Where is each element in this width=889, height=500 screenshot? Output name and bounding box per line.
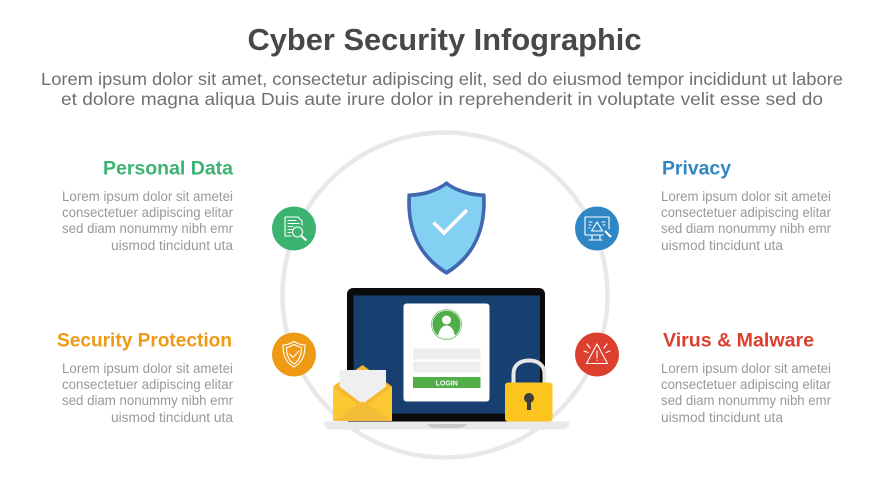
text block: Lorem ipsum dolor sit ametei [661, 361, 831, 376]
heading: Virus & Malware [663, 330, 814, 352]
text block: uismod tincidunt uta [111, 238, 233, 253]
laptop [324, 288, 569, 430]
text block [661, 361, 831, 425]
text block [62, 189, 233, 253]
text block: consectetuer adipiscing elitar [62, 377, 233, 392]
icon: warning triangle [575, 332, 619, 376]
password field [413, 362, 480, 372]
subtitle: Lorem ipsum dolor sit amet, consectetur adipiscing elit, sed do eiusmod tempor incididunt ut labore [41, 69, 843, 89]
subtitle [41, 69, 843, 109]
subtitle: et dolore magna aliqua Duis aute irure dolor in reprehenderit in voluptate velit esse sed do [61, 89, 823, 109]
panel: privacy [661, 158, 831, 253]
central ring [282, 132, 608, 458]
icon: envelope [333, 365, 392, 421]
text block [62, 361, 233, 425]
heading: Personal Data [103, 158, 233, 180]
username field [413, 348, 480, 360]
panel: personal data [62, 158, 233, 253]
icon: padlock [505, 360, 552, 422]
text block: Lorem ipsum dolor sit ametei [661, 189, 831, 204]
text block: sed diam nonummy nibh emr [661, 393, 831, 408]
text block: consectetuer adipiscing elitar [661, 377, 831, 392]
text block: sed diam nonummy nibh emr [62, 221, 233, 236]
text block [661, 189, 831, 253]
icon: document search [272, 206, 316, 250]
login card [404, 304, 490, 402]
icon: monitor warning [575, 206, 619, 250]
text block: consectetuer adipiscing elitar [661, 205, 831, 220]
panel: security protection [57, 330, 233, 425]
text block: sed diam nonummy nibh emr [661, 221, 831, 236]
heading: Security Protection [57, 330, 232, 352]
icon: user avatar [432, 310, 462, 340]
text block: Lorem ipsum dolor sit ametei [62, 361, 233, 376]
title: Cyber Security Infographic [248, 23, 642, 57]
icon: shield outline [272, 332, 316, 376]
login button: LOGIN [436, 380, 458, 387]
text block: Lorem ipsum dolor sit ametei [62, 189, 233, 204]
panel: virus and malware [661, 330, 831, 425]
text block: consectetuer adipiscing elitar [62, 205, 233, 220]
text block: uismod tincidunt uta [661, 238, 783, 253]
text block: uismod tincidunt uta [661, 410, 783, 425]
text block: sed diam nonummy nibh emr [62, 393, 233, 408]
icon: shield [407, 181, 486, 275]
heading: Privacy [662, 158, 731, 180]
text block: uismod tincidunt uta [111, 410, 233, 425]
